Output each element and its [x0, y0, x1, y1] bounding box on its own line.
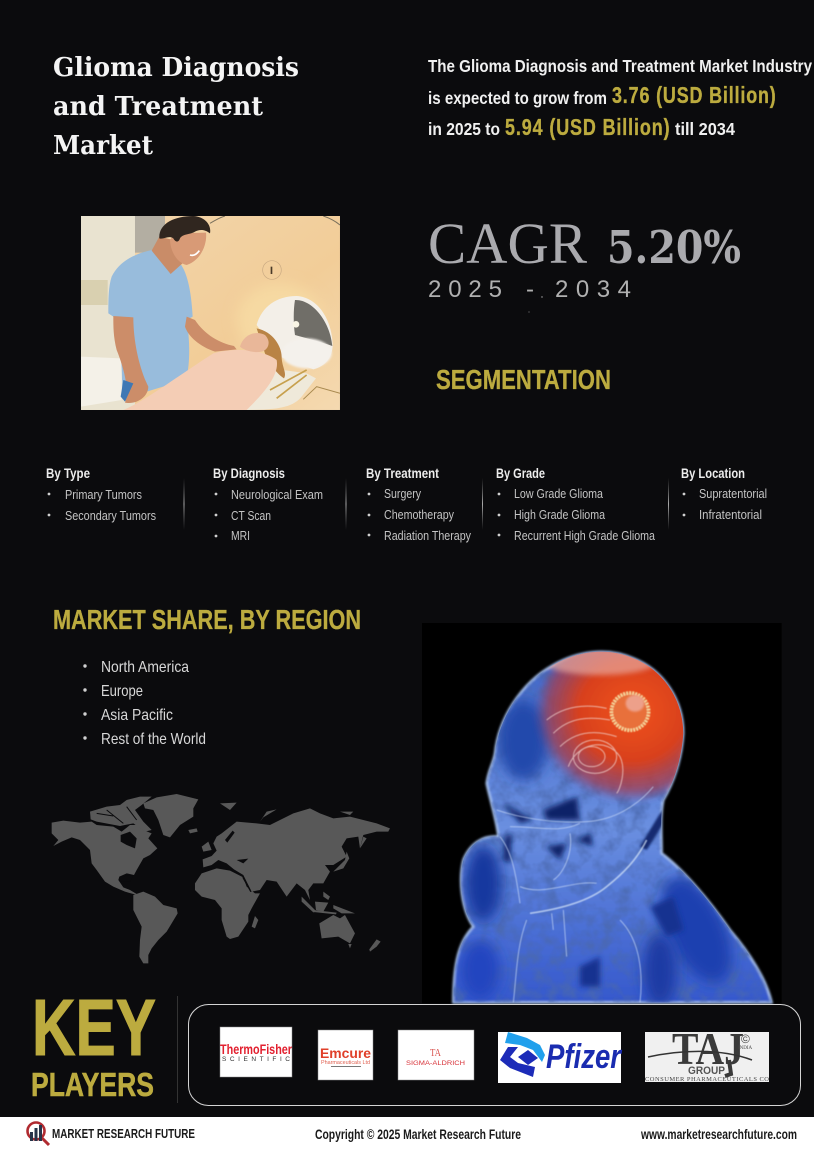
footer brand: MARKET RESEARCH FUTURE: [52, 1127, 195, 1141]
logo: TAJ Group: TAJ: [672, 1023, 744, 1074]
segment: by diagnosis: [213, 465, 323, 543]
photo: doctor with child at MRI scanner: [81, 216, 340, 410]
segment: by type: [46, 465, 156, 523]
segment: by diagnosis: Neurological Exam: [231, 488, 323, 502]
key players heading: [31, 983, 156, 1103]
world map: [52, 794, 390, 963]
CAGR value: 5.20%: [607, 221, 741, 274]
segment: by diagnosis: By Diagnosis: [213, 465, 285, 481]
region list: Rest of the World: [101, 731, 206, 748]
segment: by grade: By Grade: [496, 465, 545, 481]
segment: by diagnosis: CT Scan: [231, 509, 271, 523]
segment: by grade: High Grade Glioma: [514, 508, 605, 522]
segment: by diagnosis: MRI: [231, 529, 250, 543]
logo: Pfizer: Pfizer: [546, 1038, 622, 1076]
segment: by treatment: Chemotherapy: [384, 508, 455, 522]
logo: TAJ Group: ©: [741, 1032, 750, 1046]
CAGR period: 2034: [555, 276, 631, 303]
man: [108, 250, 193, 402]
segment: by treatment: Radiation Therapy: [384, 529, 472, 543]
region list: Europe: [101, 683, 143, 700]
CAGR value: [428, 211, 741, 276]
title: [53, 53, 299, 161]
segment: by grade: [496, 465, 655, 543]
region list: North America: [101, 659, 189, 676]
blanket and table: [246, 370, 316, 410]
logo: Thermo Fisher Scientific: SCIENTIFIC: [222, 1056, 290, 1063]
market size text block: is expected to grow from: [428, 88, 607, 108]
title: and Treatment: [53, 92, 263, 122]
logo: Emcure: [318, 1030, 373, 1080]
logo: Pfizer: [498, 1032, 622, 1083]
market size text block: 5.94 (USD Billion): [505, 115, 670, 141]
segment: by location: [681, 465, 767, 522]
logo: TAJ Group: GROUP: [688, 1065, 725, 1077]
market size text block: 3.76 (USD Billion): [612, 83, 776, 109]
market size text block: till 2034: [675, 119, 735, 139]
segment: by grade: Low Grade Glioma: [514, 487, 603, 501]
logo: Emcure: Pharmaceuticals Ltd: [321, 1060, 370, 1066]
logo: Thermo Fisher Scientific: [220, 1027, 292, 1077]
segmentation heading: SEGMENTATION: [436, 364, 611, 395]
logo: TAJ Group: CONSUMER PHARMACEUTICALS CO: [645, 1076, 769, 1083]
region list: [83, 659, 206, 748]
segment: by type: By Type: [46, 465, 90, 481]
CAGR period: [428, 276, 631, 312]
logo: TAJ Group: INDIA: [738, 1046, 753, 1051]
logo: Sigma-Aldrich: TA: [430, 1047, 441, 1059]
segment: by type: Primary Tumors: [65, 488, 142, 502]
logo: Thermo Fisher Scientific: ThermoFisher: [220, 1041, 292, 1057]
CAGR period: -: [526, 276, 534, 303]
logo: Emcure: Emcure: [320, 1045, 371, 1061]
segment: by treatment: Surgery: [384, 487, 422, 501]
logo: TAJ Group: [645, 1023, 769, 1083]
market size text block: [428, 56, 812, 141]
logo: Sigma-Aldrich: [398, 1030, 474, 1080]
logo: Sigma-Aldrich: SIGMA-ALDRICH: [406, 1060, 465, 1067]
segment: by location: Supratentorial: [699, 487, 767, 501]
segment: by grade: Recurrent High Grade Glioma: [514, 529, 655, 543]
market share heading: MARKET SHARE, BY REGION: [53, 604, 361, 635]
region list: Asia Pacific: [101, 707, 173, 724]
footer bar: [0, 1117, 814, 1150]
girl: [240, 333, 269, 352]
segment: by location: Infratentorial: [699, 508, 762, 522]
key players heading: KEY: [32, 983, 156, 1072]
key players panel: [188, 1004, 800, 1106]
image: brain tumour x-ray figure: [422, 623, 782, 1007]
key players heading: PLAYERS: [31, 1066, 154, 1103]
title: Glioma Diagnosis: [53, 53, 299, 83]
segment: by type: Secondary Tumors: [65, 509, 156, 523]
icon: market research future logo: [28, 1122, 49, 1145]
footer copyright: Copyright © 2025 Market Research Future: [315, 1127, 521, 1142]
segment: by treatment: By Treatment: [366, 465, 439, 481]
title: Market: [53, 131, 153, 161]
market size text block: in 2025 to: [428, 119, 500, 139]
CAGR value: CAGR: [428, 211, 587, 276]
segment: by location: By Location: [681, 465, 745, 481]
segment: by treatment: [366, 465, 472, 543]
CAGR period: 2025: [428, 276, 502, 303]
